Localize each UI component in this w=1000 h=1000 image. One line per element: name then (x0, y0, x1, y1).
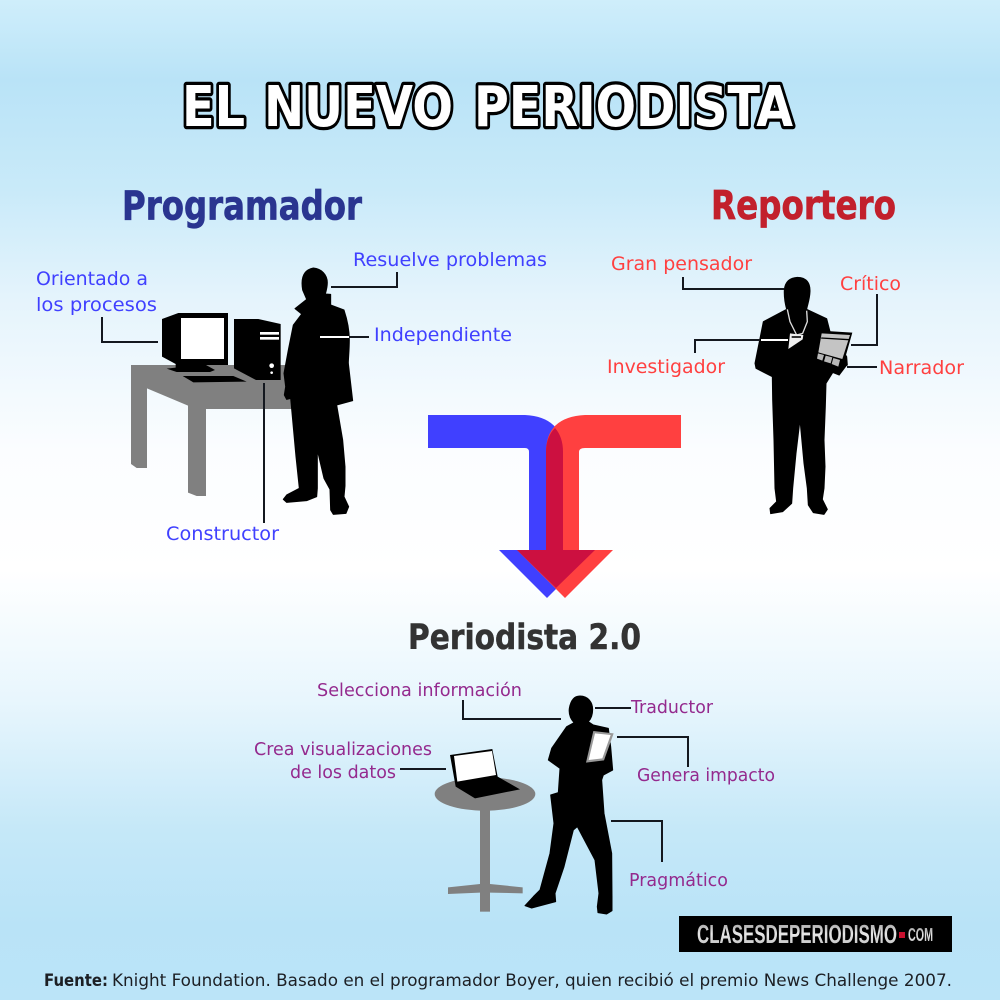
leader: independiente (320, 336, 369, 338)
leader: orientado (102, 317, 158, 342)
logo: clasesdeperiodismo.com (679, 916, 952, 952)
leader: investigador (695, 340, 788, 353)
label: Crítico: Crítico (840, 273, 901, 295)
icon: lanyard and badge (787, 309, 807, 349)
title: PERIODISTA (474, 75, 794, 140)
leader: pragmático (611, 821, 662, 862)
heading: Reportero: Reportero (711, 183, 896, 229)
leader: crítico (851, 294, 877, 345)
label: Selecciona información: Selecciona información (317, 681, 522, 701)
label: Resuelve problemas: Resuelve problemas (353, 249, 547, 271)
icon: keyboard (183, 376, 247, 382)
label: Gran pensador: Gran pensador (611, 253, 752, 275)
label: Crea visualizaciones de los datos: de los datos (290, 763, 396, 783)
label: Orientado a los procesos: los procesos (36, 294, 157, 316)
icon: computer tower (234, 319, 281, 380)
label: Crea visualizaciones de los datos: Crea visualizaciones (254, 740, 432, 760)
label: Crea visualizaciones de los datos (254, 740, 432, 783)
illustration: table, laptop and journalist (435, 696, 614, 914)
footer: source: Knight Foundation. Basado en el programador Boyer, quien recibió el premio News Challenge 2007. (112, 971, 952, 990)
title: NUEVO (264, 75, 453, 140)
label: Orientado a los procesos (36, 268, 157, 316)
label: Constructor: Constructor (166, 523, 279, 545)
silhouette: reporter (755, 277, 852, 514)
label: Genera impacto: Genera impacto (637, 766, 775, 786)
icon: table (435, 777, 535, 912)
arrow: blue and red merging (428, 415, 681, 598)
heading: Programador: Programador (122, 184, 362, 230)
panel: reportero (607, 253, 964, 514)
label: Pragmático: Pragmático (629, 871, 728, 891)
leader: traductor (595, 707, 631, 709)
leader: genera impacto (617, 737, 688, 767)
label: Narrador: Narrador (879, 357, 964, 379)
label: Independiente: Independiente (374, 324, 512, 346)
icon: notebook (817, 331, 852, 376)
icon: desk (131, 365, 292, 496)
panel: programador (36, 249, 547, 545)
leader: resuelve (331, 272, 397, 287)
icon: monitor (162, 313, 228, 372)
leader: gran pensador (683, 277, 784, 289)
label: Orientado a los procesos: Orientado a (36, 268, 148, 290)
icon: tablet (586, 731, 614, 763)
silhouette: programmer (283, 268, 353, 514)
logo: clasesdeperiodismo.com: CLASESDEPERIODISMO (697, 919, 897, 949)
leader: selecciona (463, 700, 561, 719)
icon: laptop (450, 749, 520, 798)
silhouette: journalist (525, 696, 613, 914)
illustration: desk, computer and programmer (131, 268, 353, 514)
heading: Periodista 2.0: Periodista 2.0 (408, 618, 641, 658)
label: Traductor: Traductor (630, 698, 714, 718)
leader: constructor (263, 383, 265, 523)
leader: narrador (847, 366, 877, 368)
panel: periodista 2.0 (254, 681, 775, 914)
label: Investigador: Investigador (607, 356, 725, 378)
logo: clasesdeperiodismo.com: COM (908, 925, 933, 945)
footer: source: Fuente: (44, 971, 108, 990)
leader: crea visualizaciones (400, 768, 446, 770)
title (182, 75, 794, 140)
title: EL (182, 75, 245, 140)
